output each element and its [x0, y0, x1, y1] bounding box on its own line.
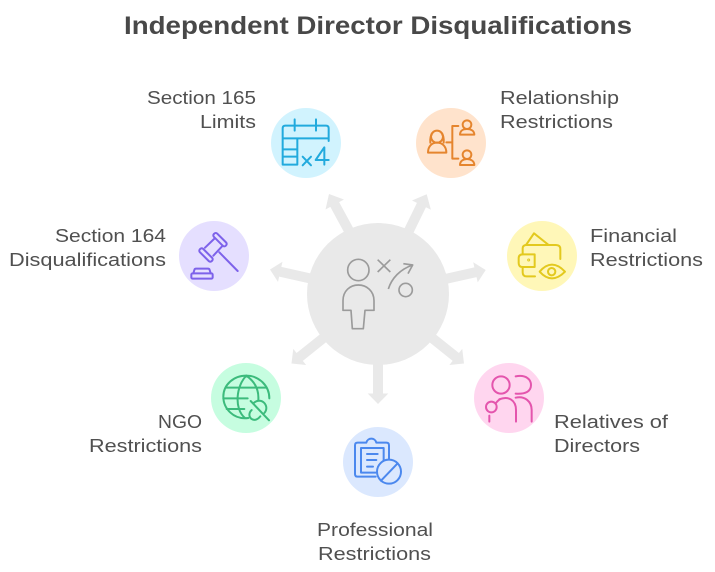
- node: Professional Restrictions: [317, 427, 433, 564]
- icon: person with two reports: [428, 120, 474, 165]
- label: Restrictions: [89, 436, 202, 456]
- node: Relationship Restrictions: [416, 88, 619, 178]
- node: Relatives of Directors: [474, 363, 669, 456]
- label: NGO: [158, 412, 202, 432]
- label: Relatives of: [554, 412, 669, 432]
- label: Restrictions: [500, 112, 613, 132]
- label: Relationship: [500, 88, 619, 108]
- label: Restrictions: [590, 250, 703, 270]
- label: Limits: [200, 112, 256, 132]
- icon: relatives group: [486, 376, 532, 422]
- arrow: to Relatives of Directors: [419, 324, 470, 372]
- label: [147, 88, 256, 132]
- label: Directors: [554, 436, 640, 456]
- label: [554, 412, 669, 456]
- label: [89, 412, 202, 456]
- label: [9, 226, 166, 270]
- label: Financial: [590, 226, 677, 246]
- icon: wallet with eye: [519, 233, 565, 278]
- icon: strategist person with play diagram: [343, 259, 413, 329]
- arrow: to Financial Restrictions: [435, 260, 488, 291]
- label: [500, 88, 619, 132]
- node: Section 165 Limits: [147, 88, 341, 178]
- label: [590, 226, 703, 270]
- arrow: to Section 165 Limits: [320, 189, 362, 243]
- arrow: to Professional Restrictions: [368, 354, 388, 404]
- title: Independent Director Disqualifications: [124, 12, 632, 40]
- label: Restrictions: [318, 544, 431, 564]
- node: Financial Restrictions: [507, 221, 703, 291]
- arrow: to Relationship Restrictions: [395, 190, 436, 244]
- node: Section 164 Disqualifications: [9, 221, 249, 291]
- label: Section 165: [147, 88, 256, 108]
- label: Professional: [317, 520, 433, 540]
- arrow: to Section 164 Disqualifications: [268, 259, 321, 290]
- label: Section 164: [55, 226, 166, 246]
- label: [317, 520, 433, 564]
- central hub: [307, 223, 449, 365]
- icon: gavel: [191, 232, 238, 279]
- arrow: to NGO Restrictions: [285, 324, 337, 372]
- label: Disqualifications: [9, 250, 166, 270]
- icon: calendar times four: [283, 119, 329, 165]
- icon: clipboard with prohibition sign: [355, 439, 401, 484]
- node: NGO Restrictions: [89, 363, 281, 456]
- icon: globe with broken link: [223, 376, 269, 420]
